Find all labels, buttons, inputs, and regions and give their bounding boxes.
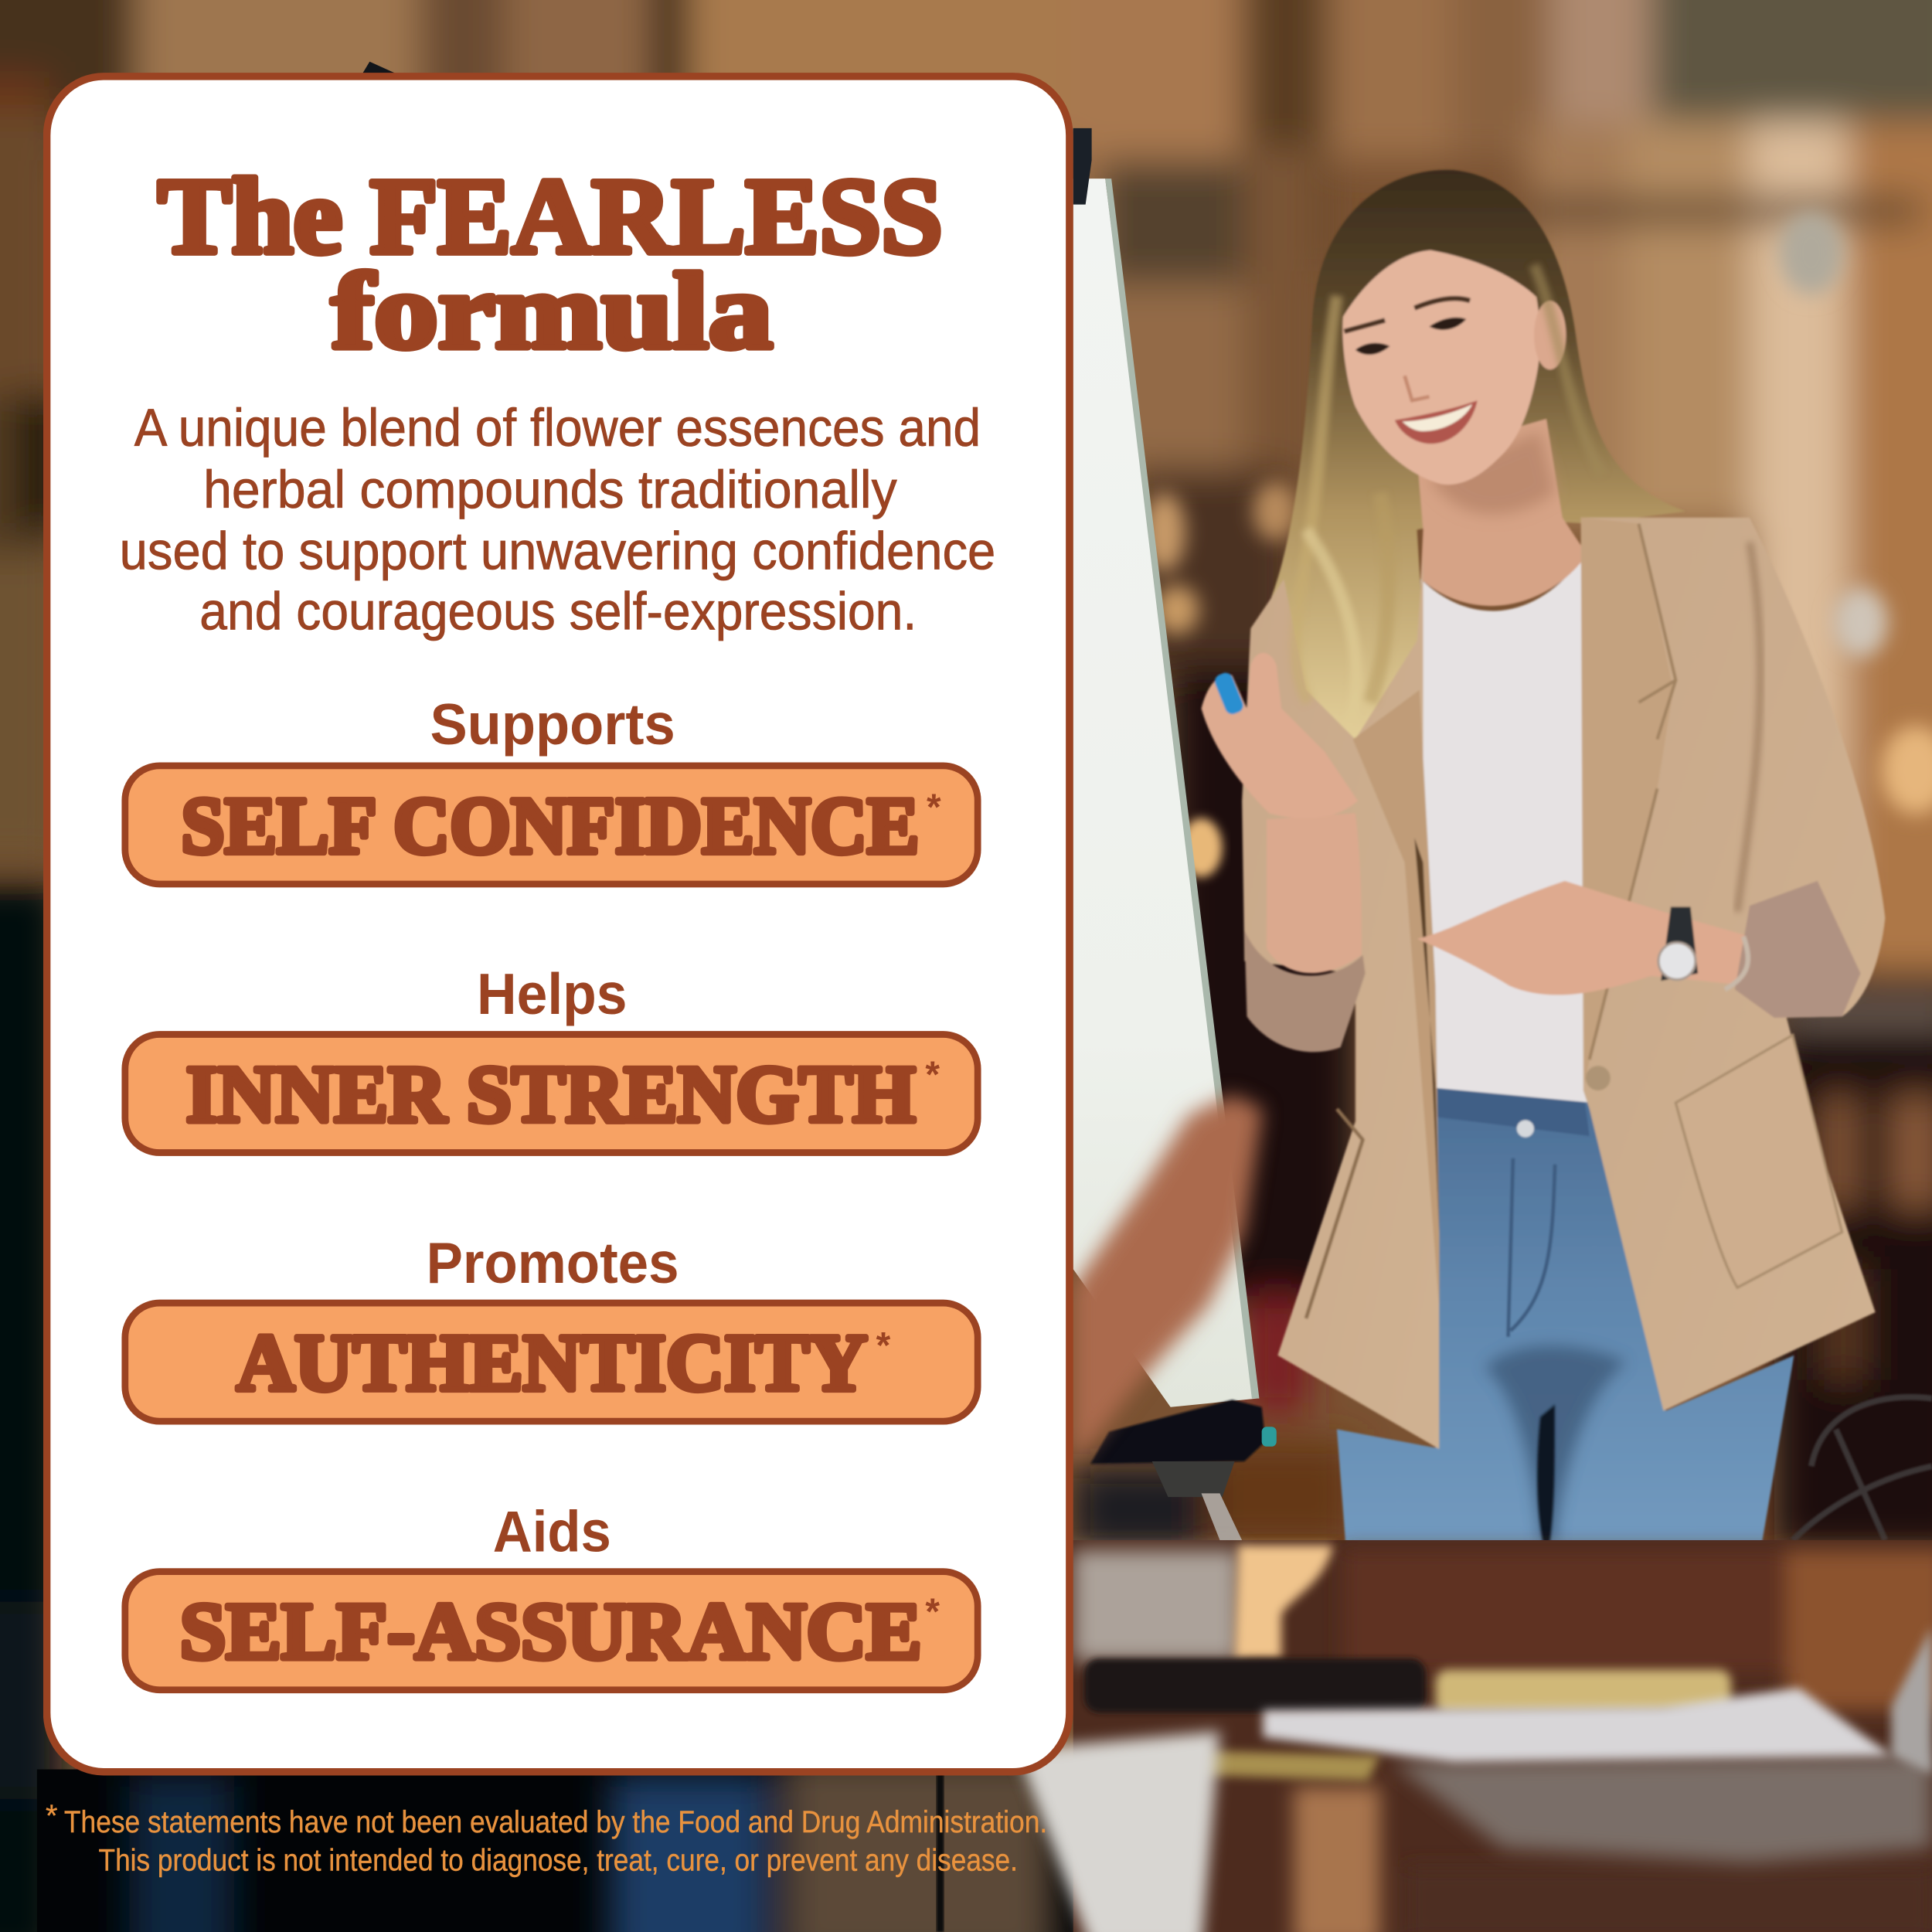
panel: formula card (47, 77, 1070, 1772)
left blazer panel and sleeve (1242, 554, 1439, 1449)
benefit: aids self-assurance: Aids (493, 1498, 611, 1563)
woman presenter (1202, 170, 1885, 1543)
benefit: promotes authenticity: AUTHENTICITY (236, 1317, 867, 1407)
benefit: helps inner strength: INNER STRENGTH (186, 1049, 916, 1139)
left hand with marker (1202, 653, 1358, 818)
intro paragraph: A unique blend of flower essences and (134, 398, 981, 457)
white cup (1016, 1731, 1219, 1932)
face (1342, 250, 1566, 485)
left forearm (1267, 813, 1362, 973)
watch and bracelet (1658, 906, 1748, 989)
benefit: aids self-assurance: SELF-ASSURANCE (180, 1586, 922, 1676)
disclaimer footnote (46, 1799, 1047, 1877)
right rolled sleeve (1735, 881, 1861, 1018)
table with blurred objects (1016, 1540, 1932, 1932)
benefit: aids self-assurance (125, 1498, 978, 1690)
benefit: supports self confidence: * (927, 787, 941, 828)
intro paragraph: herbal compounds traditionally (203, 460, 897, 519)
left rolled cuff (1244, 930, 1366, 1052)
intro paragraph (120, 398, 995, 641)
benefit: helps inner strength (125, 961, 978, 1153)
benefit: promotes authenticity: Promotes (427, 1230, 679, 1295)
tank top (1420, 549, 1592, 1103)
intro paragraph: and courageous self-expression. (199, 582, 917, 641)
disclaimer footnote: This product is not intended to diagnose, treat, cure, or prevent any disease. (99, 1843, 1018, 1877)
hair front strands (1296, 265, 1602, 727)
title: The FEARLESS (158, 157, 943, 277)
benefit: helps inner strength: Helps (477, 961, 628, 1026)
benefit: supports self confidence (125, 692, 978, 884)
title (158, 157, 943, 372)
jeans (1337, 1082, 1794, 1543)
benefit: supports self confidence: Supports (430, 692, 675, 757)
easel tray (1090, 1400, 1265, 1464)
title: formula (332, 252, 773, 372)
disclaimer footnote: * (46, 1799, 58, 1833)
easel clip above panel (362, 62, 396, 74)
whiteboard on easel (1073, 128, 1277, 1540)
hair back (1257, 170, 1685, 740)
bicycle in shadow (1793, 1397, 1932, 1540)
benefit: helps inner strength: * (925, 1054, 940, 1095)
intro paragraph: used to support unwavering confidence (120, 522, 995, 581)
benefit: supports self confidence: SELF CONFIDENCE (181, 780, 919, 870)
neck and chest (1417, 419, 1587, 606)
bottom-left blurred foreground (37, 1756, 1109, 1932)
disclaimer footnote: These statements have not been evaluated by the Food and Drug Administration. (64, 1805, 1047, 1839)
blurred hand in foreground (1073, 1094, 1263, 1466)
benefit: aids self-assurance: * (925, 1591, 940, 1632)
benefit: promotes authenticity (125, 1230, 978, 1421)
benefit: promotes authenticity: * (876, 1325, 891, 1366)
right blazer panel (1581, 518, 1885, 1411)
right hand and wrist (1417, 881, 1750, 995)
